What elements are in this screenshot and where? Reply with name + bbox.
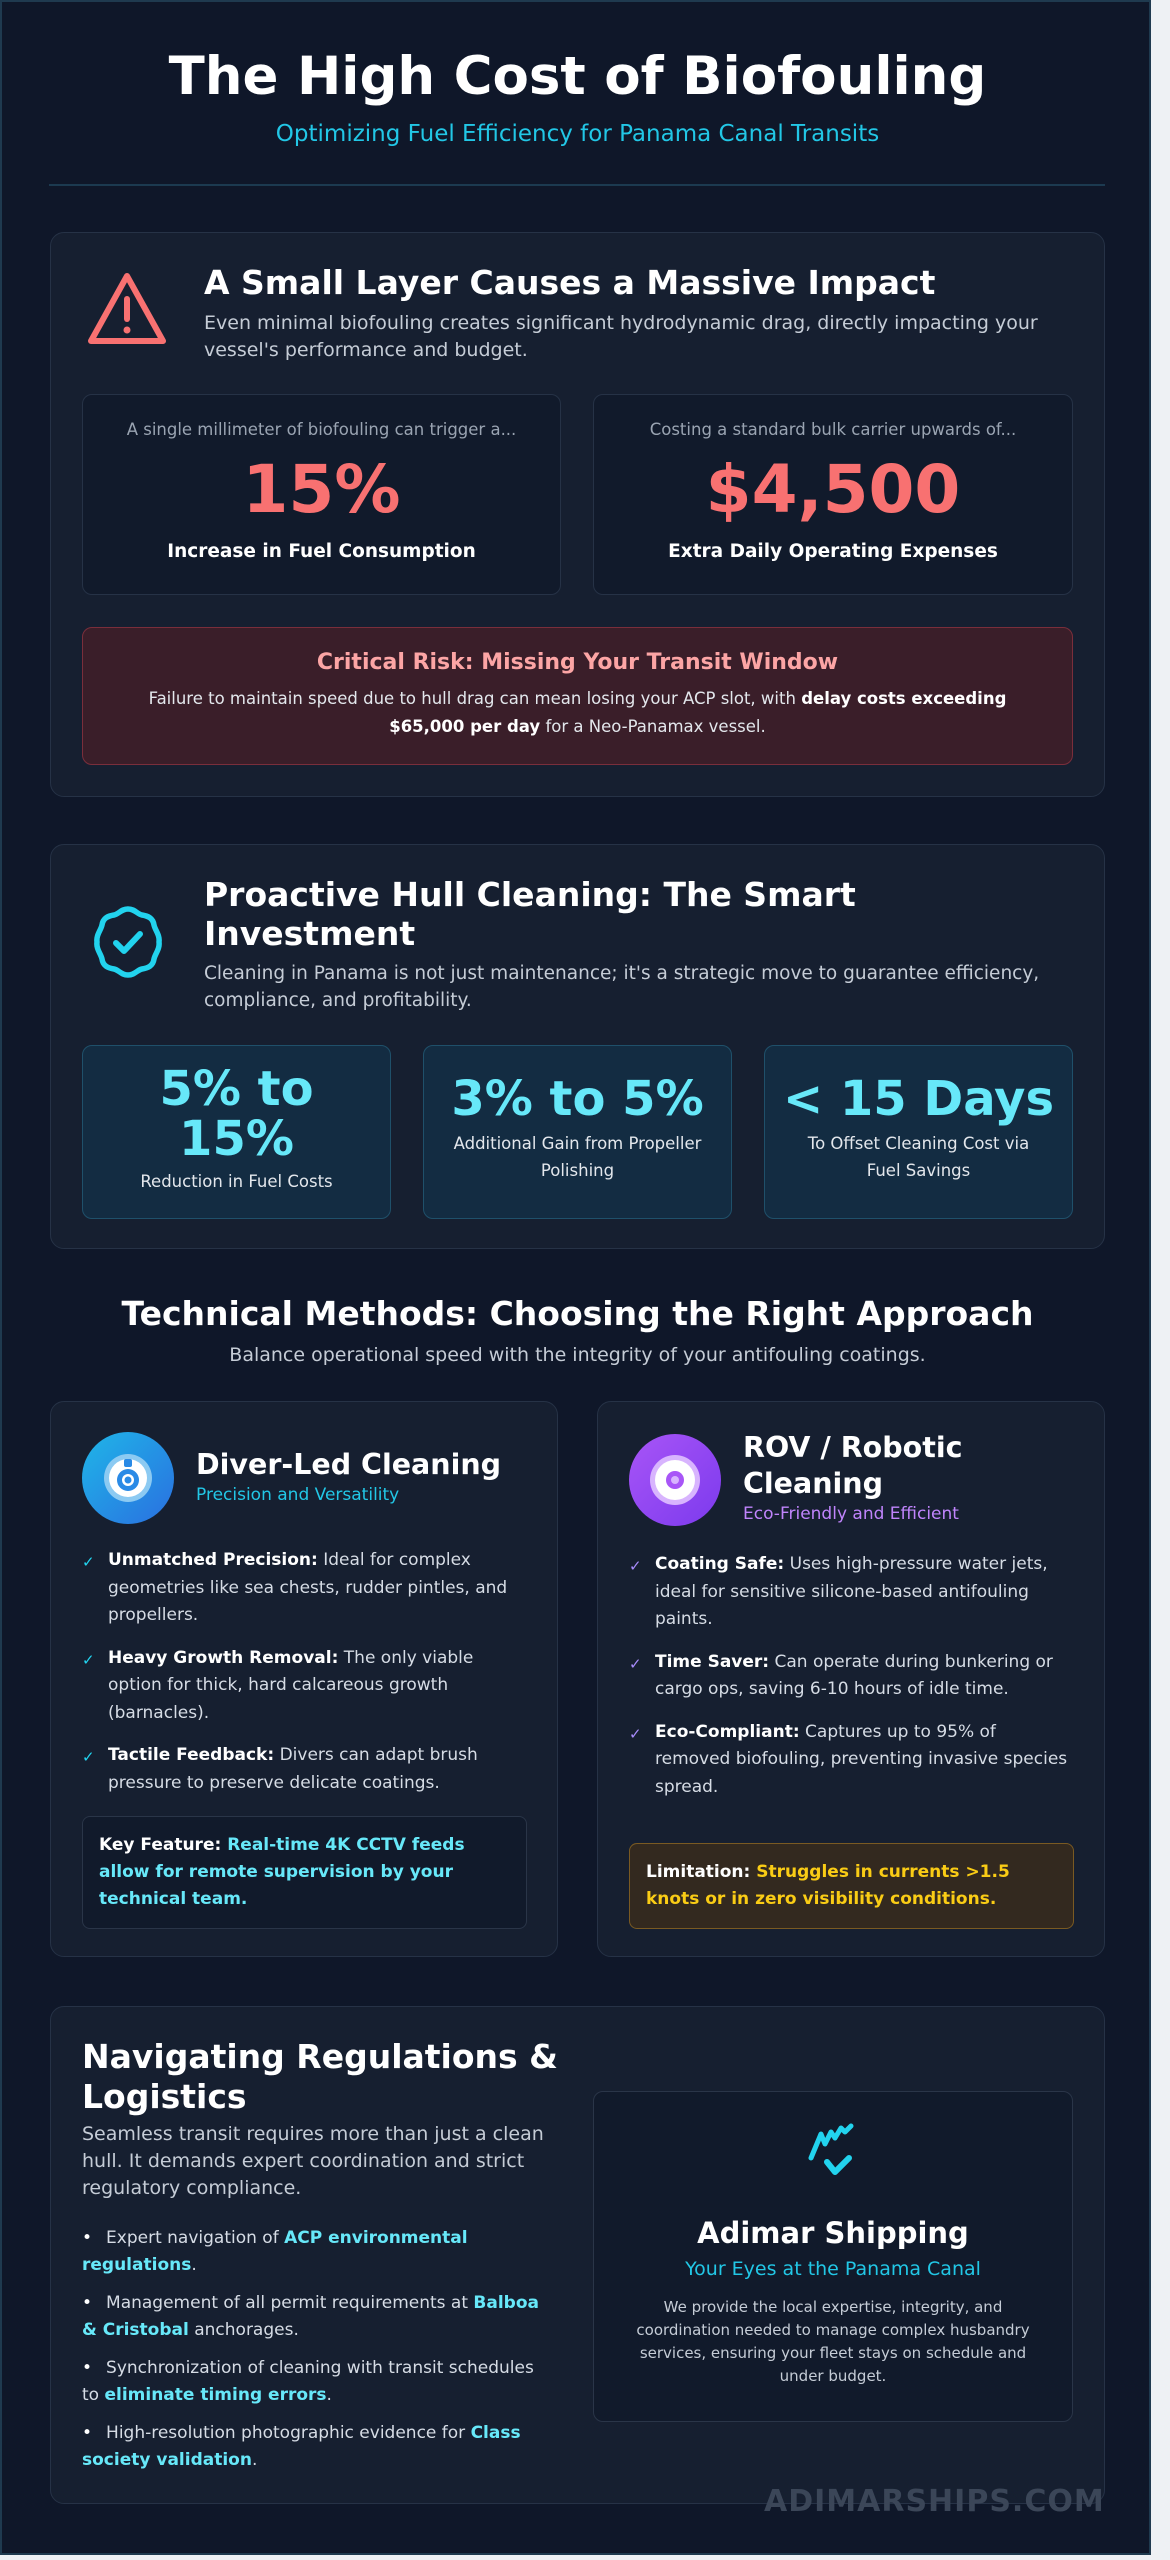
bullet list: ✓ [82, 1650, 95, 1668]
bullet list: Time Saver: Can operate during bunkering or cargo ops, saving 6-10 hours of idle time. [655, 1652, 1053, 1699]
icon: signature check [808, 2124, 854, 2175]
callout: Adimar Shipping: Your Eyes at the Panama Canal [685, 2258, 981, 2280]
bullet list: Tactile Feedback: Divers can adapt brush pressure to preserve delicate coatings. [108, 1745, 478, 1792]
bullet list: Synchronization of cleaning with transit schedules to eliminate timing errors. [82, 2358, 534, 2405]
subtitle: Optimizing Fuel Efficiency for Panama Canal Transits [276, 121, 879, 147]
card: ROV robotic cleaning [597, 1401, 1105, 1957]
bullet list [82, 2228, 539, 2470]
section heading: technical methods: Technical Methods: Choosing the Right Approach [121, 1294, 1034, 1333]
bullet list: ✓ [629, 1557, 642, 1575]
description: Seamless transit requires more than just a clean hull. It demands expert coordination and strict regulatory compliance. [82, 2123, 544, 2199]
callout: Adimar Shipping [593, 2091, 1073, 2422]
stat: 5% to 15%: Reduction in Fuel Costs [140, 1172, 333, 1191]
callout: limitation [629, 1843, 1074, 1929]
card subtitle: Eco-Friendly and Efficient [743, 1504, 959, 1524]
bullet list: Eco-Compliant: Captures up to 95% of [655, 1722, 996, 1742]
callout: Adimar Shipping: We provide the local expertise, integrity, and coordination needed to manage complex husbandry services, ensuring your fleet stays on schedule and under budget. [636, 2298, 1030, 2385]
icon: diver [82, 1432, 174, 1524]
callout: critical risk: Failure to maintain speed due to hull drag can mean losing your ACP slot, with delay costs exceeding $65,000 per day for a Neo-Panamax vessel. [149, 689, 1006, 736]
bullet list: Coating Safe: Uses high-pressure water jets, ideal for sensitive silicone-based antifouling paints. [655, 1554, 1048, 1629]
heading: Proactive Hull Cleaning: The Smart Investment [204, 875, 856, 953]
panel: small layer massive impact [50, 232, 1105, 797]
stat: 15% [82, 394, 561, 595]
stat: $4,500: Extra Daily Operating Expenses [668, 541, 998, 562]
callout: key feature [82, 1816, 527, 1929]
heading: A Small Layer Causes a Massive Impact [204, 263, 935, 302]
icon: warning triangle [88, 273, 166, 344]
bullet list: ✓ [629, 1724, 642, 1742]
stat: 15%: Increase in Fuel Consumption [167, 541, 476, 562]
section subtitle: Balance operational speed with the integrity of your antifouling coatings. [229, 1344, 926, 1366]
bullet list [82, 1550, 507, 1792]
stat: < 15 Days: Fuel Savings [867, 1161, 970, 1180]
callout: key feature: Key Feature: Real-time 4K CCTV feeds allow for remote supervision by your technical team. [99, 1835, 465, 1909]
description: Even minimal biofouling creates significant hydrodynamic drag, directly impacting your vessel's performance and budget. [204, 312, 1038, 361]
stat: $4,500: $4,500 [706, 451, 960, 528]
stat: 15%: A single millimeter of biofouling can trigger a... [127, 420, 516, 439]
bullet list: ✓ [82, 1748, 95, 1766]
bullet list: Expert navigation of ACP environmental regulations. [82, 2228, 468, 2275]
bullet list: removed biofouling, preventing invasive species spread. [655, 1749, 1067, 1796]
stat: < 15 Days [764, 1045, 1073, 1219]
stat: $4,500 [593, 394, 1073, 595]
bullet list: Heavy Growth Removal: The only viable option for thick, hard calcareous growth (barnacles). [108, 1648, 473, 1722]
stat: 3% to 5%: 3% to 5% [451, 1071, 704, 1127]
bullet list: ✓ [629, 1654, 642, 1672]
stat: < 15 Days: < 15 Days [783, 1071, 1054, 1127]
card title: ROV / Robotic Cleaning [743, 1431, 963, 1500]
bullet list: ✓ [82, 1553, 95, 1571]
card: diver-led cleaning [50, 1401, 558, 1957]
stat: 5% to 15%: 5% to [159, 1061, 314, 1117]
watermark: ADIMARSHIPS.COM [764, 2484, 1105, 2519]
bullet list: Unmatched Precision: Ideal for complex geometries like sea chests, rudder pintles, and propellers. [108, 1550, 507, 1625]
callout: Adimar Shipping: Adimar Shipping [697, 2216, 969, 2250]
callout: critical risk: Critical Risk: Missing Your Transit Window [317, 650, 838, 675]
bullet list: Management of all permit requirements at Balboa & Cristobal anchorages. [82, 2293, 539, 2340]
title: The High Cost of Biofouling [169, 46, 986, 107]
stat: 5% to 15%: 15% [179, 1111, 294, 1167]
panel: proactive hull cleaning [50, 844, 1105, 1249]
bullet list: High-resolution photographic evidence for Class society validation. [82, 2423, 521, 2470]
callout: critical risk [82, 627, 1073, 765]
stat: 15%: 15% [242, 451, 400, 528]
stat: 3% to 5%: Additional Gain from Propeller [454, 1134, 701, 1153]
stat: 5% to 15% [82, 1045, 391, 1219]
stat: 3% to 5% [423, 1045, 732, 1219]
description: Cleaning in Panama is not just maintenance; it's a strategic move to guarantee efficiency, compliance, and profitability. [204, 963, 1039, 1011]
card title: Diver-Led Cleaning [196, 1448, 501, 1481]
icon: ROV [629, 1434, 721, 1526]
stat: < 15 Days: To Offset Cleaning Cost via [808, 1134, 1029, 1153]
card subtitle: Precision and Versatility [196, 1485, 399, 1505]
heading: Navigating Regulations & Logistics [82, 2037, 558, 2116]
panel: regulations & logistics [50, 2006, 1105, 2504]
stat: $4,500: Costing a standard bulk carrier upwards of... [650, 420, 1016, 439]
icon: badge check [94, 906, 162, 978]
stat: 3% to 5%: Polishing [541, 1161, 614, 1180]
bullet list [629, 1554, 1067, 1796]
callout: limitation: Limitation: Struggles in currents >1.5 knots or in zero visibility conditions. [646, 1862, 1010, 1909]
